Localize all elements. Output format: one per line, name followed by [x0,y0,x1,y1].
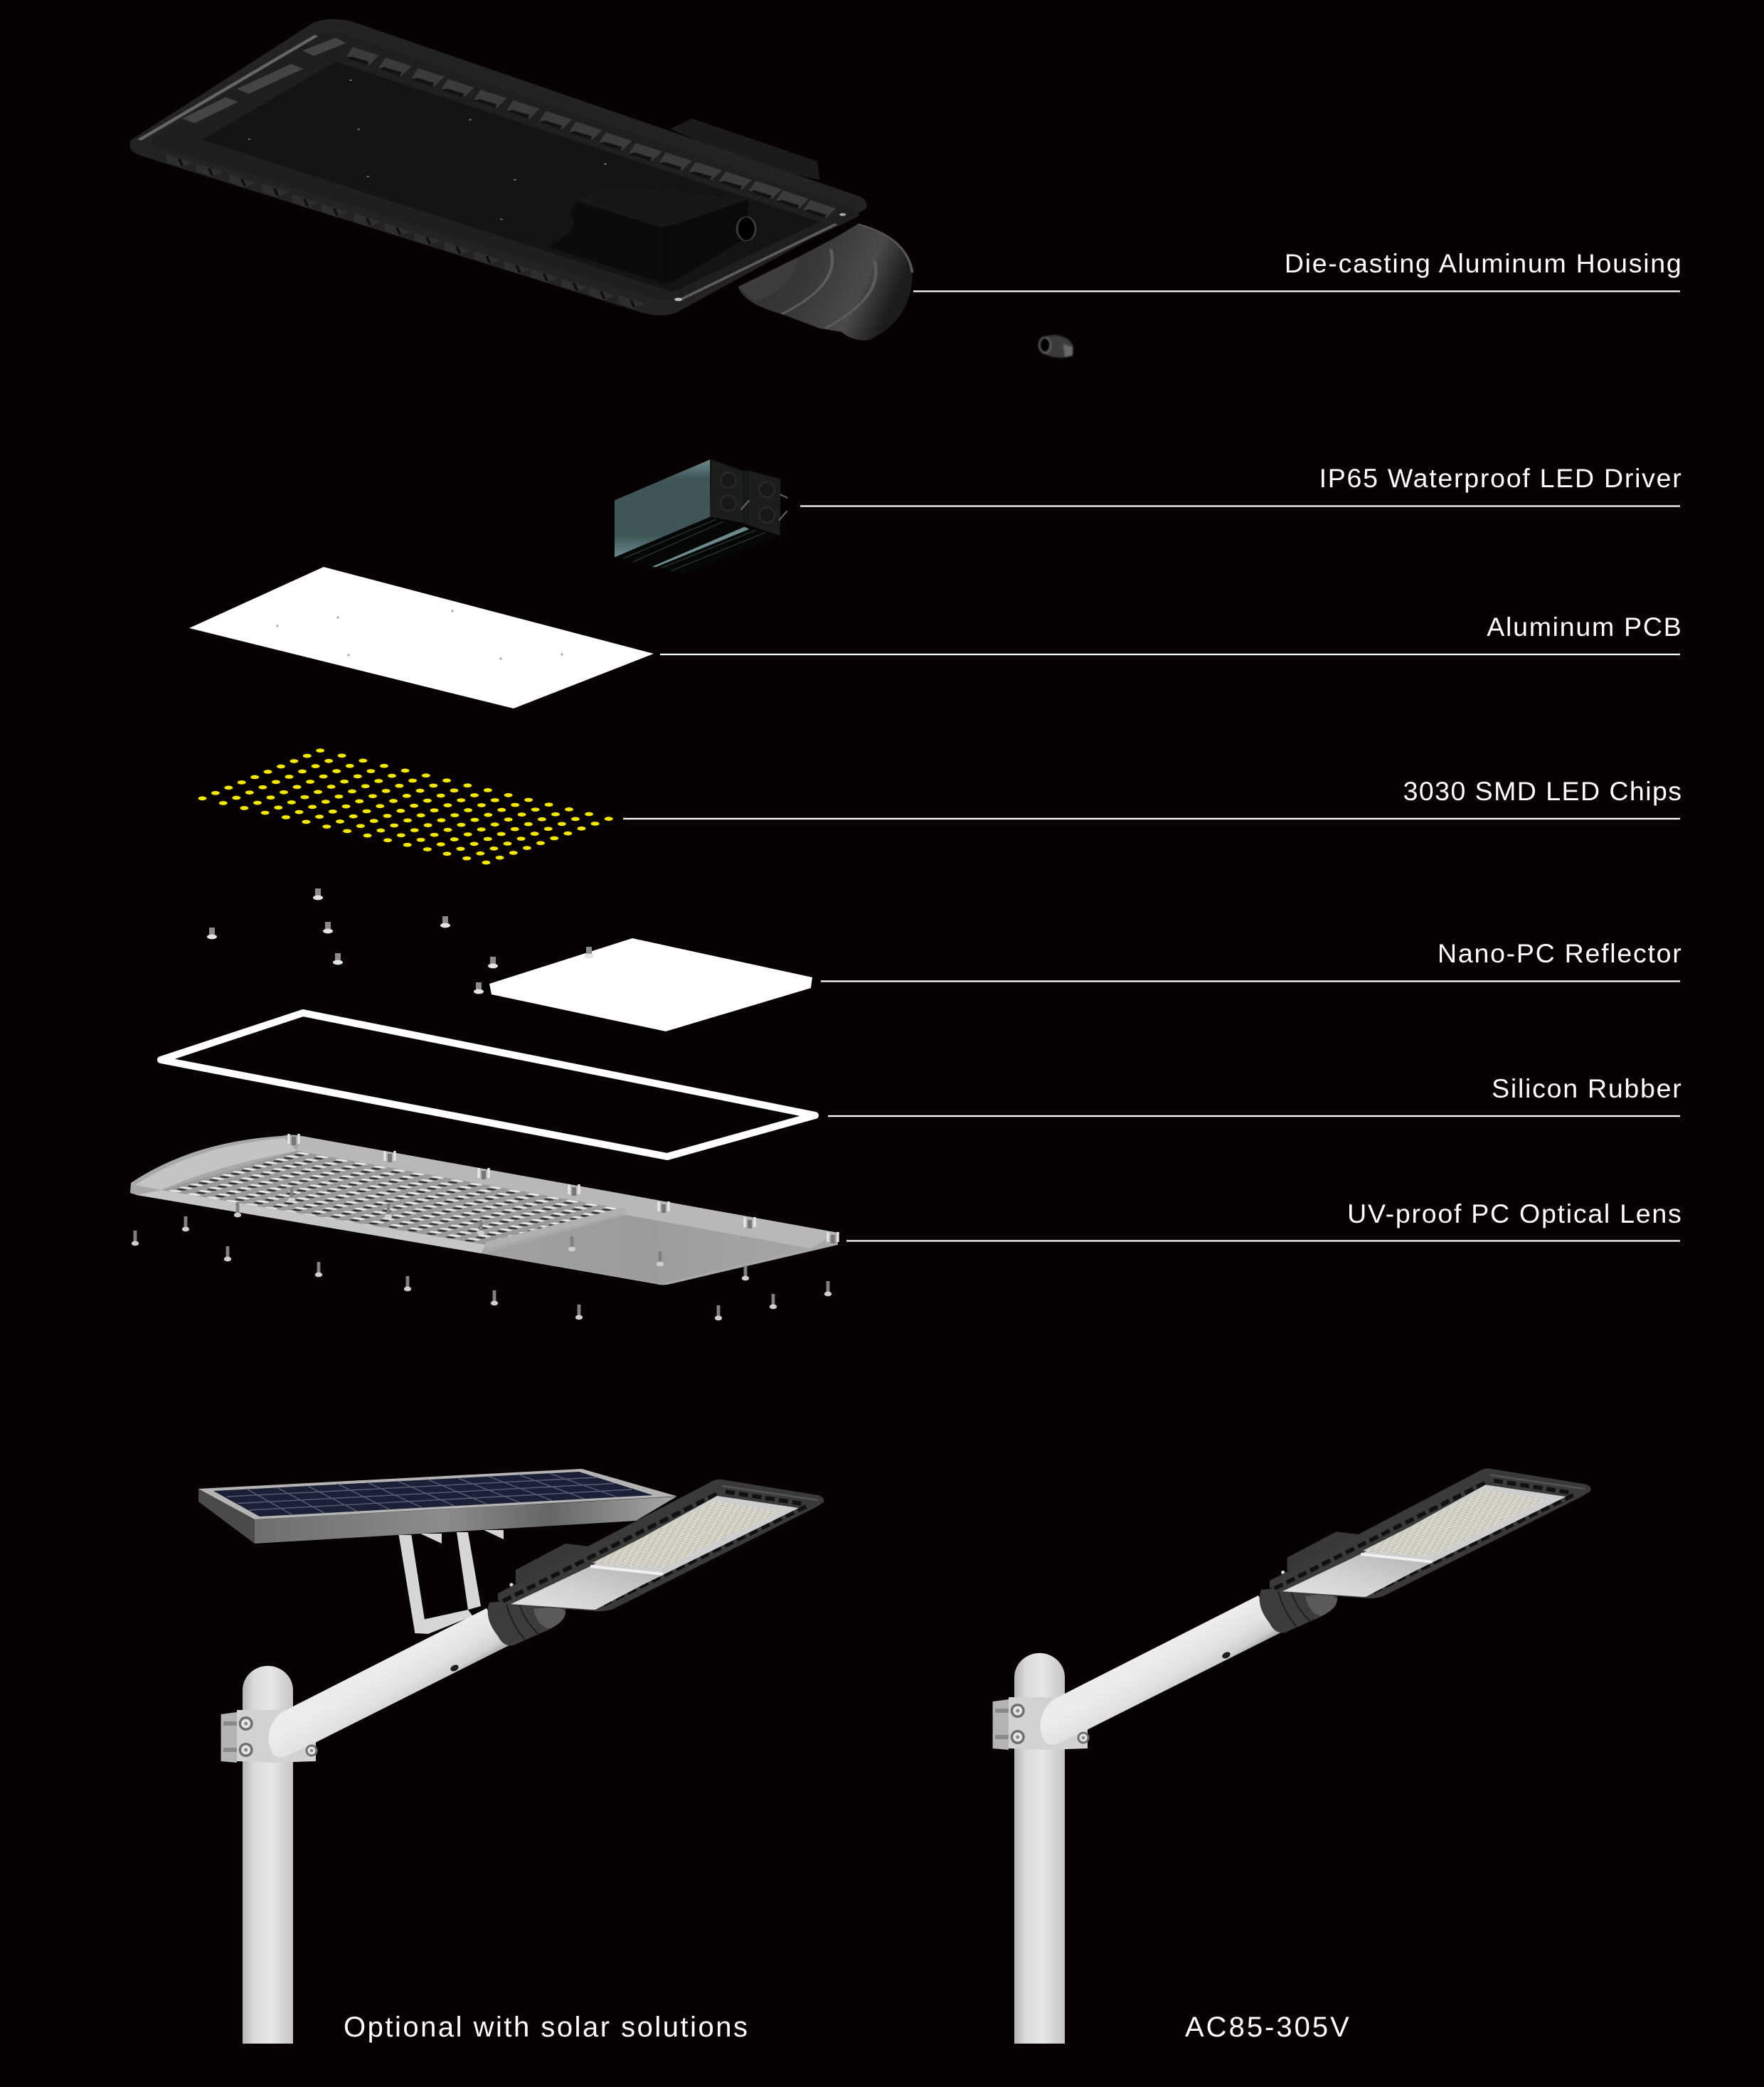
panel grid [227,1473,632,1515]
AC street light [993,1468,1590,2044]
floor [202,62,820,292]
lens upper rim [297,1136,838,1248]
label: Die-casting Aluminum Housing: Die-casting Aluminum Housing [1285,248,1683,278]
pole, arm and bracket [221,1599,565,2044]
rim highlights [139,36,317,140]
driver end caps [710,460,780,536]
lens screws [132,1187,831,1320]
cells along upper edge [346,47,836,218]
part: IP65 LED driver [615,460,787,575]
part: nano-PC reflector [489,938,812,1031]
caption: AC85-305V: AC85-305V [1185,2012,1351,2043]
inner rim [151,33,859,301]
part: small cable fitting [1039,335,1073,358]
label: 3030 SMD LED Chips: 3030 SMD LED Chips [1403,776,1683,806]
panel frame [198,1469,677,1519]
mounting cylinder [738,224,913,340]
part: silicon rubber gasket [161,1013,815,1157]
part: UV-proof PC optical lens [130,1134,838,1285]
screw holes [248,80,846,301]
lens flat section ridge [488,1211,623,1245]
panel left side [198,1489,255,1544]
outer shell [129,19,867,315]
lens flat section [484,1215,810,1284]
part: aluminum PCB [189,567,654,708]
part: 3030 SMD LED chips [203,750,611,863]
pole base extension [1014,2027,1065,2044]
lens left curve highlight [135,1138,297,1190]
lens lower edge [137,1190,486,1253]
panel front side [255,1497,676,1544]
rear box [670,119,820,180]
driver wires [741,494,787,521]
label: Aluminum PCB: Aluminum PCB [1487,612,1683,642]
part: die-casting aluminum housing [129,19,913,340]
panel cells [213,1472,653,1517]
lamp head [498,1480,824,1611]
lower rim lines [679,224,836,301]
solar panel [198,1469,677,1544]
label: Nano-PC Reflector: Nano-PC Reflector [1438,938,1683,968]
driver side face [615,460,710,557]
end cap glands [721,472,775,523]
end slots [188,41,341,121]
label: IP65 Waterproof LED Driver: IP65 Waterproof LED Driver [1319,463,1683,493]
lens outer body [130,1135,838,1285]
label: UV-proof PC Optical Lens: UV-proof PC Optical Lens [1347,1199,1683,1228]
caption: Optional with solar solutions: Optional with solar solutions [344,2012,750,2043]
solar street light [198,1469,824,2044]
reflector screws [207,888,594,994]
pole, arm and bracket [993,1586,1337,2031]
internal junction box [548,187,755,283]
driver bottom fins [615,517,780,575]
lens bump array [161,1151,623,1245]
solar panel mounting bracket [399,1530,504,1634]
label: Silicon Rubber: Silicon Rubber [1492,1073,1683,1103]
teeth along lower edge [166,154,645,309]
lamp head [1270,1468,1590,1598]
lens clips [289,1134,838,1243]
